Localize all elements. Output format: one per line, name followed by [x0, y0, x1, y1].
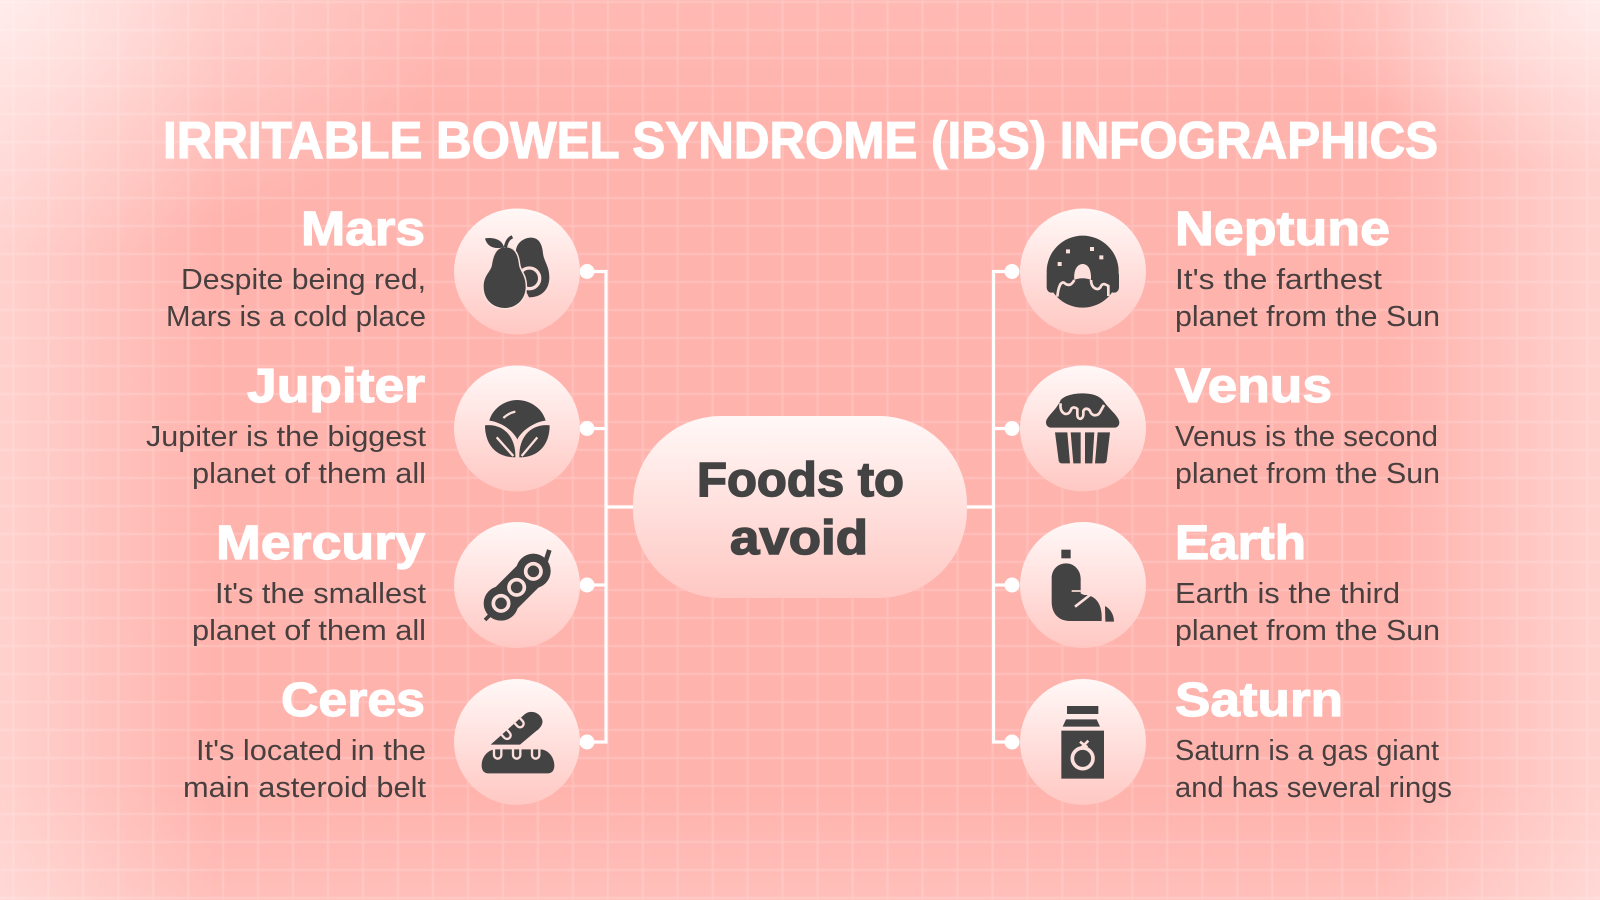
connector dot — [1004, 264, 1020, 279]
description: Earth: planet from the Sun — [1175, 615, 1440, 647]
panel: Ceres — [183, 674, 594, 805]
description: Saturn: Saturn is a gas giant — [1175, 735, 1439, 767]
description: Earth: Earth is the third — [1175, 578, 1400, 610]
heading: Earth: Earth — [1175, 517, 1306, 570]
icon: donut — [1020, 208, 1146, 334]
panel: Saturn — [1004, 674, 1452, 805]
heading: Mercury: Mercury — [216, 517, 425, 570]
icon: sauce bottle — [1020, 522, 1146, 648]
connector dot — [580, 421, 594, 436]
title: IRRITABLE BOWEL SYNDROME (IBS) INFOGRAPHICS — [163, 112, 1438, 170]
panel: Mercury — [192, 517, 594, 648]
connector dot — [580, 734, 594, 750]
description: Mercury: planet of them all — [192, 615, 426, 647]
central pill: foods to avoid: Foods to — [697, 454, 904, 507]
right connector lines — [967, 272, 1012, 742]
description: Saturn: and has several rings — [1175, 772, 1452, 804]
icon: cabbage — [454, 366, 580, 492]
panel: Venus — [1004, 360, 1440, 492]
description: Venus: planet from the Sun — [1175, 458, 1440, 490]
connector dot — [1004, 578, 1020, 592]
icon: cupcake — [1020, 366, 1146, 492]
heading: Ceres: Ceres — [281, 674, 425, 727]
connector dot — [1004, 734, 1020, 750]
icon: pea pod — [454, 522, 580, 648]
description: Jupiter: planet of them all — [192, 458, 426, 490]
central pill: foods to avoid: avoid — [730, 512, 868, 565]
connector dot — [580, 578, 594, 592]
icon: juice carton — [1020, 679, 1146, 805]
description: Mercury: It's the smallest — [215, 578, 426, 610]
panel: Earth — [1004, 517, 1440, 648]
heading: Saturn: Saturn — [1175, 674, 1343, 727]
description: Venus: Venus is the second — [1175, 421, 1438, 453]
heading: Neptune: Neptune — [1175, 203, 1390, 256]
description: Jupiter: Jupiter is the biggest — [146, 421, 426, 453]
heading: Venus: Venus — [1175, 360, 1332, 413]
description: Mars: Mars is a cold place — [166, 301, 426, 333]
central pill: foods to avoid — [633, 416, 967, 598]
connector dot — [580, 264, 594, 279]
panel: Jupiter — [146, 360, 594, 492]
description: Ceres: It's located in the — [196, 735, 426, 767]
left connector lines — [587, 272, 633, 742]
description: Mars: Despite being red, — [181, 264, 426, 296]
icon: bread — [454, 679, 580, 805]
description: Neptune: It's the farthest — [1175, 264, 1382, 296]
panel: Mars — [166, 203, 594, 334]
heading: Jupiter: Jupiter — [247, 360, 425, 413]
icon: pear and avocado — [454, 208, 580, 334]
description: Ceres: main asteroid belt — [183, 772, 426, 804]
panel: Neptune — [1004, 203, 1440, 334]
description: Neptune: planet from the Sun — [1175, 301, 1440, 333]
connector dot — [1004, 421, 1020, 436]
heading: Mars: Mars — [301, 203, 425, 256]
